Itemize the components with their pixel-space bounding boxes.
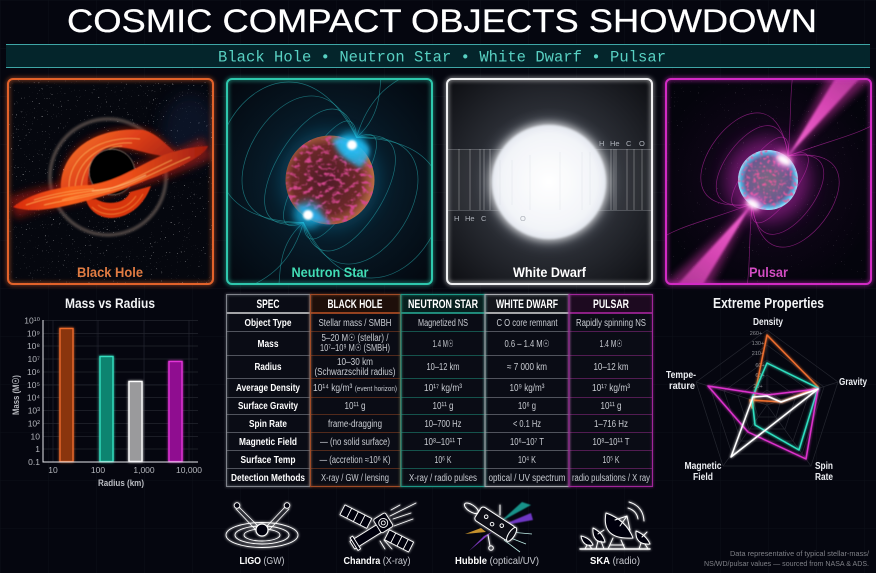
axis label: spin rate — [815, 460, 833, 483]
row: mass: Mass — [258, 339, 279, 350]
axis label: gravity: Gravity — [839, 376, 867, 388]
row: surface gravity: 10¹¹ g — [600, 401, 622, 412]
row: radius: Radius — [254, 362, 282, 373]
subtitle band: Black Hole • Neutron Star • White Dwarf • Pulsar — [218, 48, 666, 66]
row: magnetic field: Magnetic Field — [239, 437, 297, 448]
row: object type — [244, 318, 646, 329]
row: surface temp: 10⁵ K — [602, 455, 620, 466]
row: average density: Average Density — [236, 383, 300, 394]
row: mass: 1.4 M☉ — [432, 339, 454, 350]
row: magnetic field: 10⁸–10¹¹ T — [424, 437, 462, 448]
series: neutron star — [752, 363, 818, 450]
axis label: magnetic field: Magnetic — [684, 460, 722, 472]
x axis tick labels: 1,000 — [133, 465, 155, 475]
table header row: PULSAR — [593, 299, 630, 311]
x axis tick labels: 10,000 — [176, 465, 202, 475]
spectrum labels: H — [599, 139, 604, 148]
y axis tick labels: 1 — [35, 444, 40, 454]
spectrum labels: C — [481, 214, 487, 223]
row: mass: 5–20 M☉ (stellar) / — [322, 333, 389, 344]
y axis tick labels: 10⁶ — [27, 367, 40, 377]
row: spin rate: 10–700 Hz — [424, 419, 462, 430]
row: mass: 10⁷–10⁹ M☉ (SMBH) — [320, 343, 390, 354]
x axis title: Radius (km) — [98, 478, 144, 489]
label: Neutron Star: Neutron Star — [292, 264, 369, 280]
radar scale labels — [750, 331, 765, 390]
label: LIGO (GW): LIGO (GW) — [240, 555, 284, 567]
series: black hole — [750, 335, 818, 408]
row: radius — [254, 357, 628, 378]
y axis tick labels: 10⁸ — [27, 341, 40, 351]
radar scale labels: 20+ — [753, 384, 763, 390]
label: SKA (radio): SKA (radio) — [590, 555, 640, 567]
instrument: Chandra — [339, 503, 416, 567]
x axis tick labels: 100 — [91, 465, 105, 475]
row: surface temp — [240, 455, 620, 466]
table header row: BLACK HOLE — [328, 299, 383, 311]
instrument: LIGO — [226, 503, 298, 567]
row: object type: Object Type — [244, 318, 292, 329]
row: radius: 10–12 km — [594, 362, 628, 373]
y axis tick labels: 10⁴ — [27, 392, 40, 402]
label: Chandra (X-ray): Chandra (X-ray) — [344, 555, 410, 567]
row: surface gravity: Surface Gravity — [238, 401, 298, 412]
row: surface temp: Surface Temp — [240, 455, 296, 466]
footnote: NS/WD/pulsar values — sourced from NASA & ADS. — [704, 559, 869, 568]
row: spin rate: < 0.1 Hz — [513, 419, 541, 430]
panel: black hole — [8, 79, 218, 284]
series: pulsar — [708, 386, 818, 459]
bar: neutron star — [100, 356, 113, 462]
row: surface gravity: 10¹¹ g — [432, 401, 454, 412]
row: spin rate: 1–716 Hz — [594, 419, 628, 430]
row: detection methods: radio pulsations / X ray — [572, 473, 650, 484]
axis label: magnetic field: Field — [693, 471, 713, 483]
row: surface gravity: 10⁶ g — [518, 401, 536, 412]
table header row: WHITE DWARF — [496, 299, 558, 311]
axis label: temperature: rature — [669, 380, 695, 392]
axis label: temperature — [666, 369, 696, 392]
label: Hubble (optical/UV): Hubble (optical/UV) — [455, 555, 539, 567]
row: detection methods — [231, 473, 650, 484]
row: object type: C O core remnant — [496, 318, 558, 329]
icon: gravitational wave detector — [226, 503, 298, 548]
row: spin rate — [249, 419, 628, 430]
row: radius: 10–12 km — [426, 362, 460, 373]
radar scale labels: 130+ — [752, 341, 764, 347]
y axis tick labels: 10³ — [28, 406, 40, 416]
spectrum labels: C — [626, 139, 632, 148]
row: average density: 10⁹ kg/m³ — [510, 383, 545, 394]
row: mass: 0.6 – 1.4 M☉ — [504, 339, 550, 350]
spectrum labels: H — [454, 214, 459, 223]
bar: pulsar — [169, 362, 182, 462]
spectrum labels: He — [610, 139, 620, 148]
row: surface temp: — (accretion ≈10⁶ K) — [320, 455, 390, 466]
radar scale labels: 210+ — [752, 351, 764, 357]
row: mass — [258, 333, 623, 354]
row: average density: 10¹⁷ kg/m³ — [592, 383, 631, 394]
row: surface gravity: 10¹¹ g — [344, 401, 366, 412]
bar: black hole — [60, 328, 73, 462]
panel: neutron star — [222, 74, 437, 289]
subtitle band — [6, 44, 870, 68]
icon: radio dish array — [580, 502, 650, 549]
radar scale labels: 260+ — [750, 331, 762, 337]
series: white dwarf — [731, 389, 818, 457]
row: average density: 10¹⁴ kg/m³ (event horizon) — [313, 383, 397, 394]
row: surface temp: 10⁴ K — [518, 455, 536, 466]
radar scale labels: 60+ — [755, 373, 765, 379]
radar title: Extreme Properties — [713, 295, 824, 312]
spectrum labels — [454, 139, 645, 223]
row: detection methods: X-ray / radio pulses — [409, 473, 477, 484]
x axis tick labels — [48, 465, 202, 475]
row: detection methods: Detection Methods — [231, 473, 305, 484]
y axis tick labels: 10⁵ — [27, 380, 40, 390]
y axis title: Mass (M☉) — [11, 375, 22, 415]
row: average density: 10¹⁷ kg/m³ — [424, 383, 463, 394]
instrument: Hubble — [455, 497, 539, 567]
y axis tick labels: 10² — [28, 418, 40, 428]
bar chart: mass vs radius — [11, 295, 202, 489]
label: Black Hole: Black Hole — [77, 264, 143, 280]
row: spin rate: frame-dragging — [328, 419, 382, 430]
panel: pulsar — [661, 74, 876, 289]
icon: Chandra satellite — [339, 503, 416, 552]
row: detection methods: optical / UV spectrum — [488, 473, 566, 484]
row: magnetic field: 10⁸–10¹¹ T — [592, 437, 630, 448]
y axis tick labels: 10 — [31, 432, 40, 442]
row: mass: 1.4 M☉ — [600, 339, 623, 350]
icon: Hubble telescope with spectrum rays — [460, 497, 533, 552]
label: Pulsar: Pulsar — [749, 264, 788, 280]
axis label: temperature: Tempe- — [666, 369, 696, 381]
row: surface temp: 10⁶ K — [434, 455, 452, 466]
y axis tick labels: 10⁹ — [27, 328, 40, 338]
x axis tick labels: 10 — [48, 465, 58, 475]
row: radius: 10–30 km — [337, 357, 373, 368]
row: average density — [236, 383, 631, 394]
panel: white dwarf — [447, 79, 652, 284]
row: magnetic field: — (no solid surface) — [320, 437, 390, 448]
spectrum labels: O — [639, 139, 645, 148]
bar: white dwarf — [129, 382, 142, 462]
footnote — [704, 549, 870, 568]
y axis tick labels: 10⁷ — [27, 354, 40, 364]
table header row — [256, 299, 630, 311]
axis label: magnetic field — [684, 460, 722, 483]
axis label: spin rate: Rate — [815, 471, 833, 483]
radar scale labels: 60+ — [755, 363, 765, 369]
title: COSMIC COMPACT OBJECTS SHOWDOWN — [67, 3, 817, 39]
table header row: NEUTRON STAR — [408, 299, 479, 311]
label: White Dwarf: White Dwarf — [513, 264, 586, 280]
row: radius: ≈ 7 000 km — [507, 362, 547, 373]
radar chart: extreme properties — [666, 295, 867, 483]
row: magnetic field: 10⁶–10⁷ T — [510, 437, 544, 448]
row: radius: (Schwarzschild radius) — [314, 367, 396, 378]
row: spin rate: Spin Rate — [249, 419, 287, 430]
axis label: spin rate: Spin — [815, 460, 833, 472]
spectrum labels: O — [520, 214, 526, 223]
row: detection methods: X-ray / GW / lensing — [321, 473, 389, 484]
y axis tick labels — [24, 316, 41, 467]
y axis tick labels: 0.1 — [28, 457, 40, 467]
chart title: Mass vs Radius — [65, 295, 155, 311]
comparison table — [226, 294, 653, 487]
table header row: SPEC — [256, 299, 280, 311]
row: object type: Stellar mass / SMBH — [318, 318, 392, 329]
axis label: density: Density — [753, 316, 783, 328]
instrument: SKA — [580, 502, 650, 567]
footnote: Data representative of typical stellar-mass/ — [730, 549, 870, 558]
row: magnetic field — [239, 437, 630, 448]
row: surface gravity — [238, 401, 622, 412]
row: object type: Magnetized NS — [418, 318, 468, 329]
spectrum labels: He — [465, 214, 475, 223]
y axis tick labels: 10¹⁰ — [24, 316, 41, 326]
row: object type: Rapidly spinning NS — [576, 318, 646, 329]
